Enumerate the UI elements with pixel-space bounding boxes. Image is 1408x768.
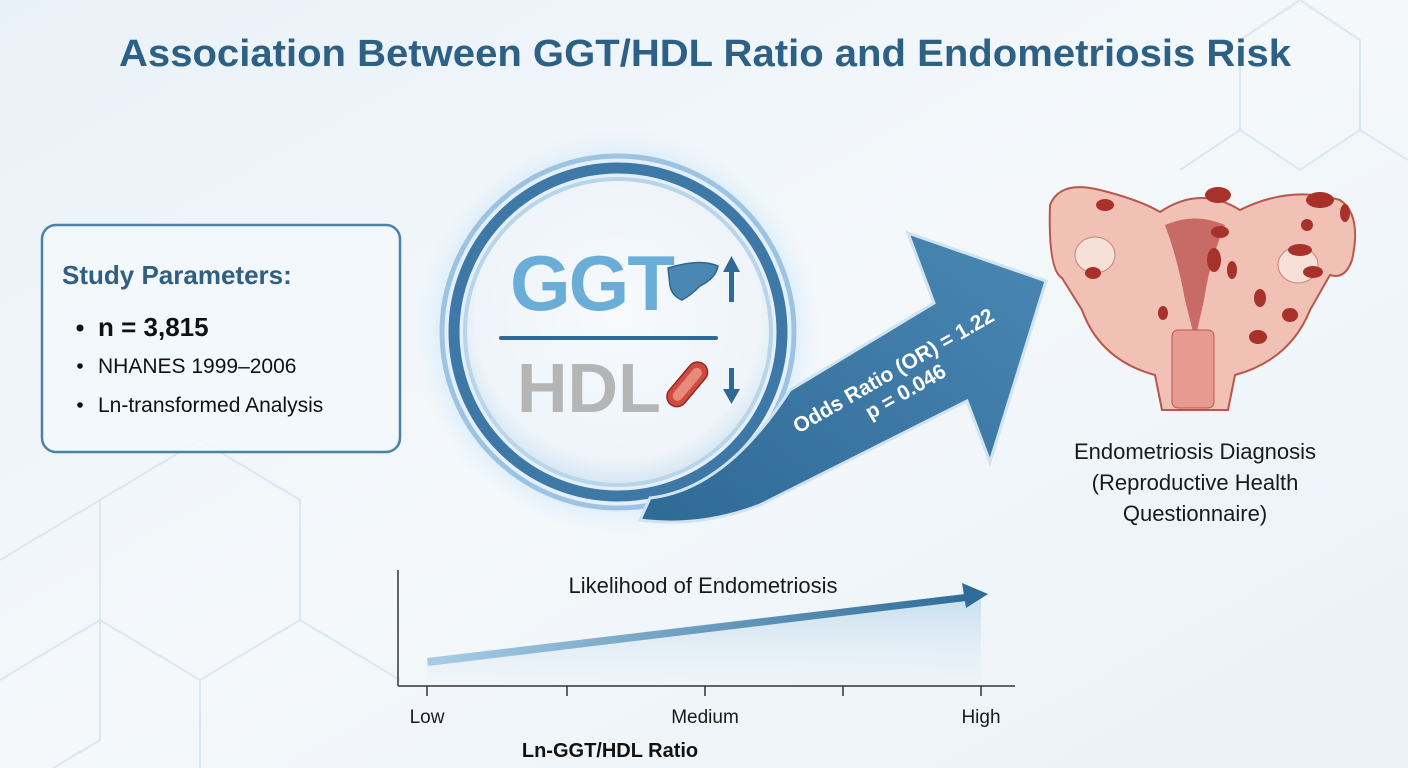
icon: arrow up	[723, 256, 740, 302]
text block: parameter list: Ln-transformed Analysis	[98, 394, 323, 417]
text: endometriosis diagnosis: (Reproductive Health	[1092, 470, 1298, 495]
chart: likelihood vs ratio	[398, 570, 1015, 762]
axis labels	[410, 707, 1001, 728]
text: endometriosis diagnosis: Endometriosis Diagnosis	[1074, 439, 1316, 464]
axis labels: Medium	[671, 707, 739, 728]
title: Association Between GGT/HDL Ratio and Endometriosis Risk	[119, 33, 1292, 75]
ratio circle	[413, 127, 823, 537]
text: HDL: HDL	[517, 349, 661, 427]
text: endometriosis diagnosis	[1074, 439, 1316, 526]
arrow: odds ratio	[640, 233, 1046, 522]
chart label: likelihood: Likelihood of Endometriosis	[568, 573, 838, 598]
text: odds ratio: p = 0.046	[861, 360, 950, 424]
axis title: Ln-GGT/HDL Ratio	[522, 740, 698, 762]
trend arrow	[427, 583, 988, 666]
icon: arrow down	[723, 368, 740, 404]
text block: parameter list	[76, 312, 323, 417]
icon: liver	[668, 262, 718, 300]
text: endometriosis diagnosis: Questionnaire)	[1123, 501, 1267, 526]
icon: blood vessel	[663, 358, 712, 411]
axis labels: Low	[410, 707, 445, 728]
text: GGT: GGT	[510, 239, 674, 327]
text: odds ratio: Odds Ratio (OR) = 1.22	[789, 304, 998, 438]
text block: parameter list: n = 3,815	[98, 312, 209, 342]
panel: study parameters	[42, 225, 400, 452]
axis labels: High	[961, 707, 1001, 728]
text block: parameter list: NHANES 1999–2006	[98, 355, 296, 378]
illustration: endometriosis uterus	[1050, 187, 1355, 410]
heading: study parameters: Study Parameters:	[62, 260, 292, 290]
